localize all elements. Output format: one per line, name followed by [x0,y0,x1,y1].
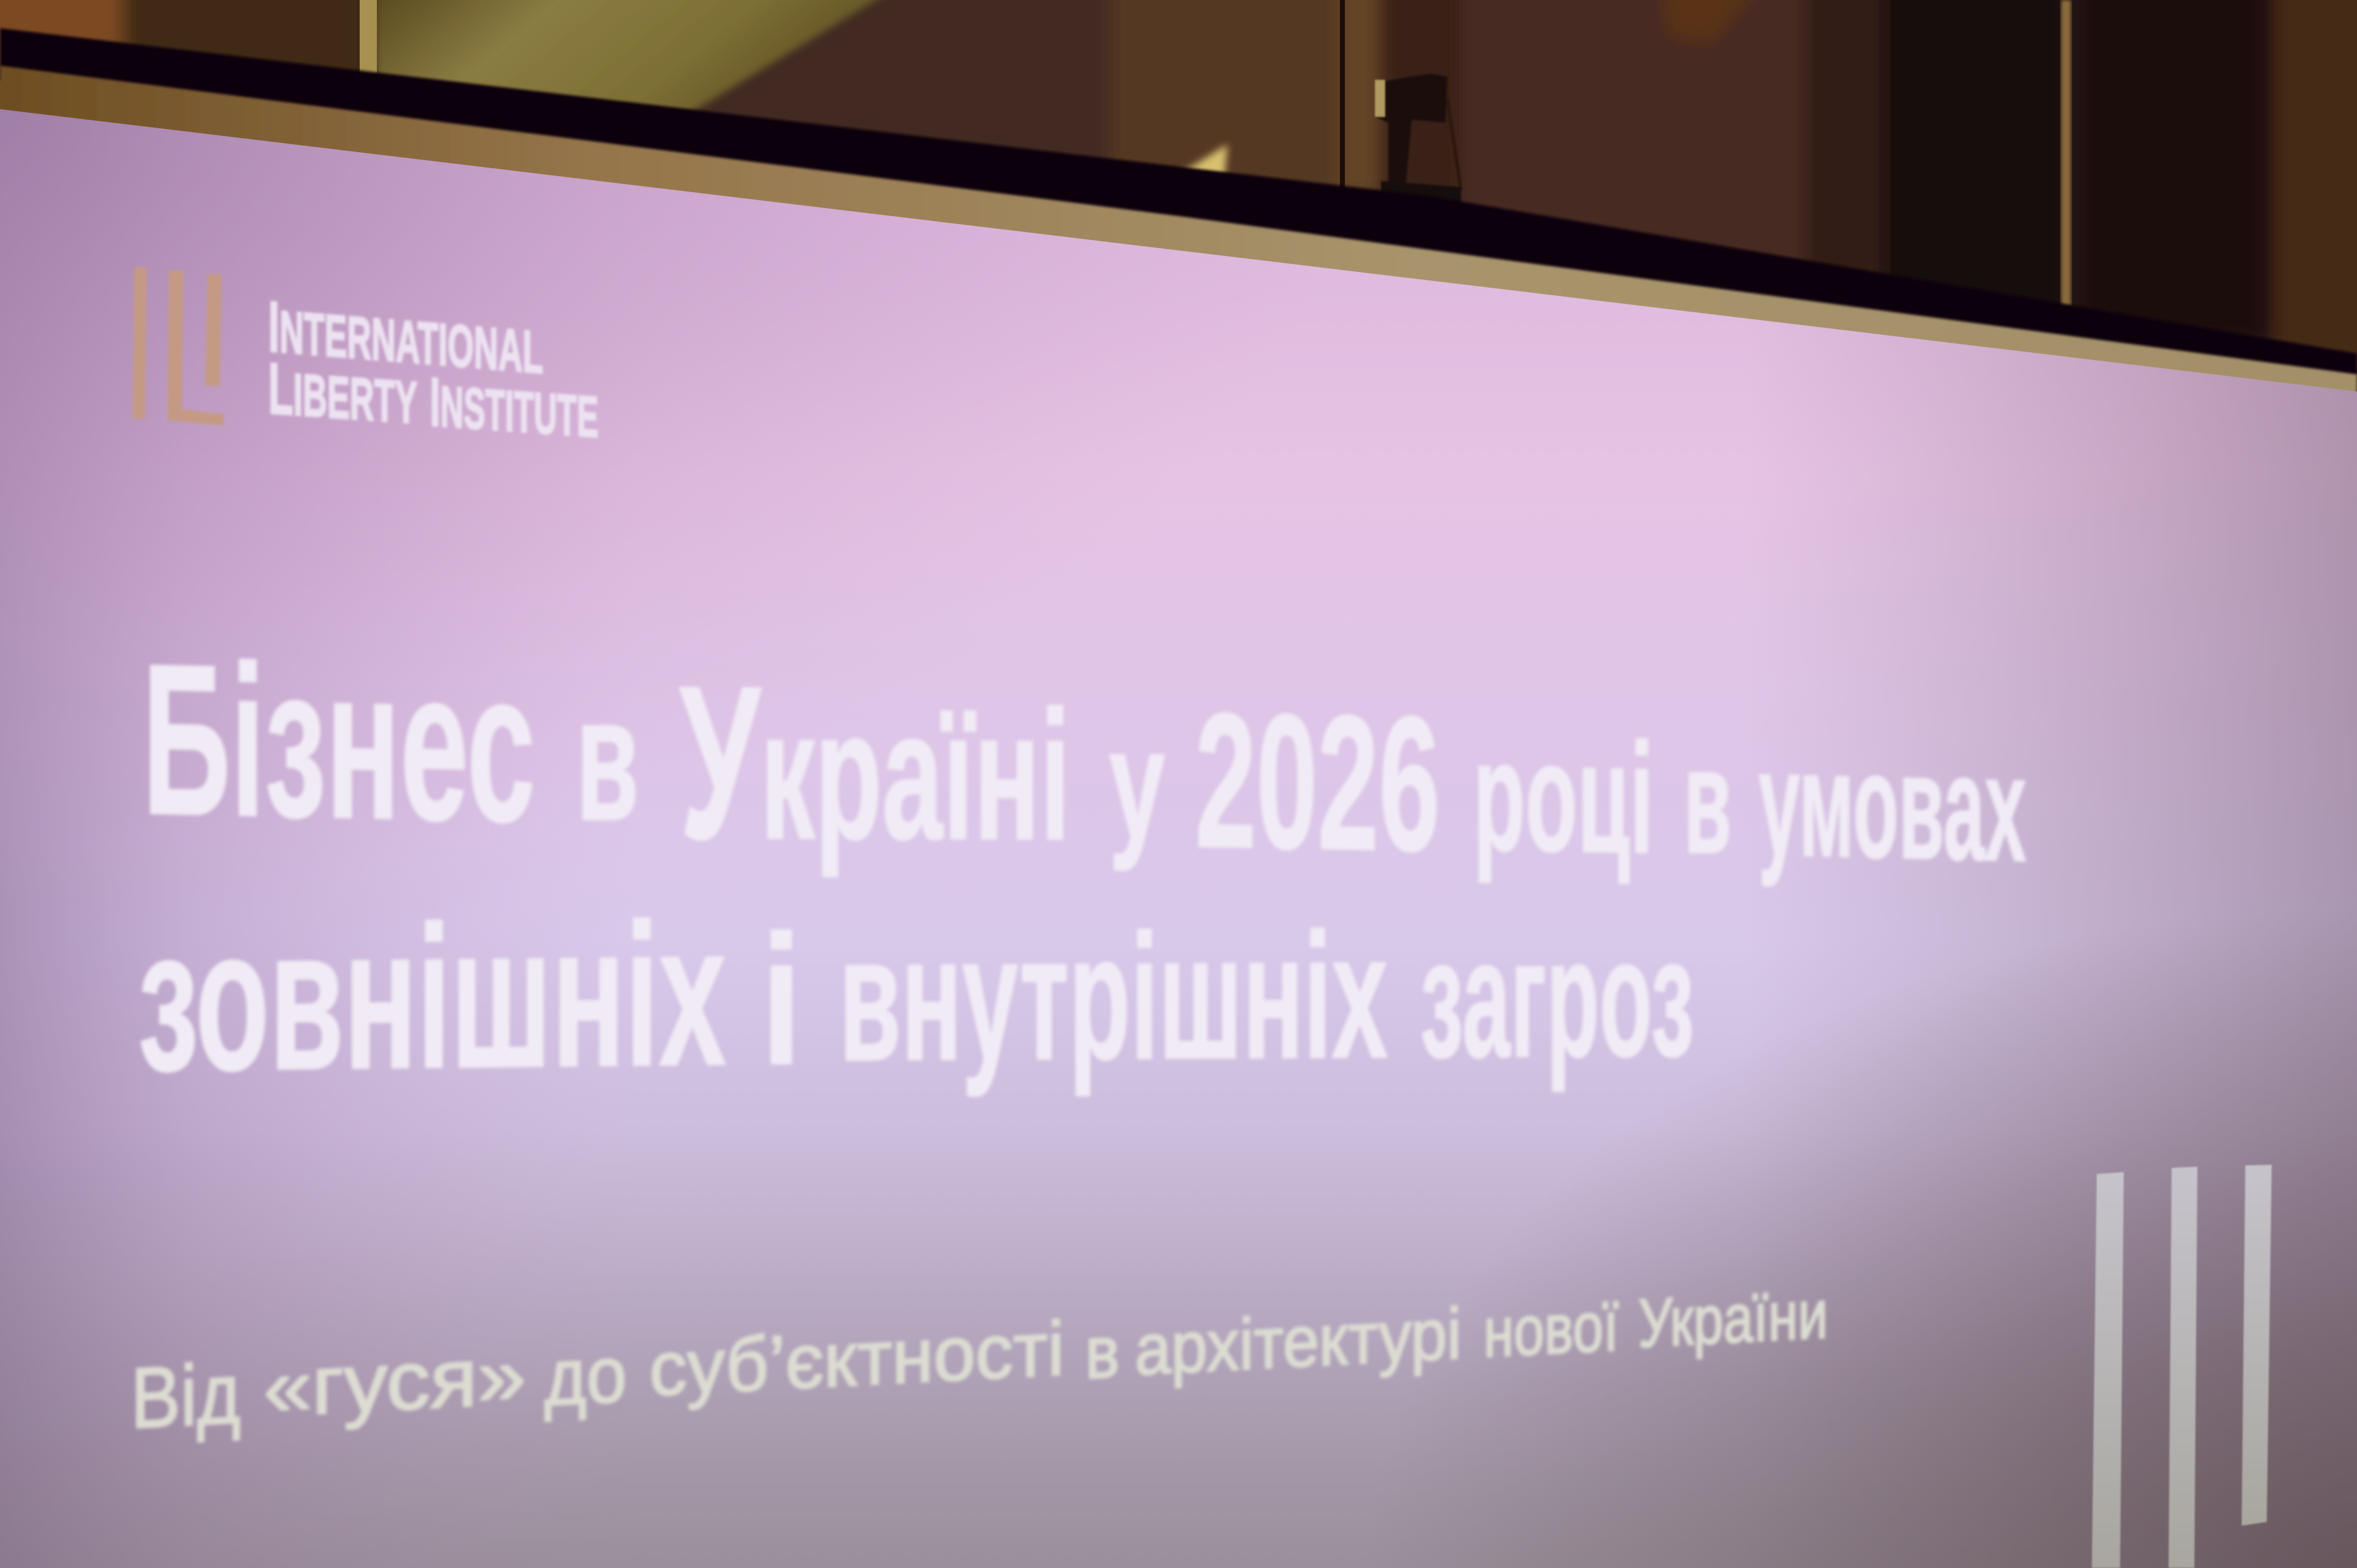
background room behind the screen [0,0,2357,491]
title: внутрішніх [839,896,1388,1099]
title: Бізнес [142,619,535,867]
title: у [1109,697,1165,871]
title: зовнішніх [138,881,727,1113]
title: в [1684,716,1732,884]
title: і [761,897,802,1103]
logo mark [133,267,223,425]
subtitle: Від [131,1345,241,1446]
screen white frame [0,66,2357,399]
subtitle: в [1085,1310,1120,1394]
title: 2026 [1195,674,1440,892]
logo wordmark: LIBERTY [268,348,417,439]
logo wordmark: INTERNATIONAL [268,286,543,388]
subtitle: України [1638,1275,1828,1362]
title: в [576,660,639,857]
title [138,619,2026,1113]
projected slide: умовах [1759,718,2026,893]
decorative three bars [2092,1165,2272,1568]
subtitle: до [544,1329,627,1423]
device on top of the screen [1375,74,1461,209]
title: році [1473,708,1654,886]
logo wordmark: INSTITUTE [430,363,598,452]
subtitle: суб’єктності [649,1305,1064,1412]
subtitle: нової [1484,1287,1619,1372]
logo wordmark [268,286,598,452]
subtitle: архітектурі [1135,1293,1461,1391]
subtitle [131,1275,1828,1446]
black screen housing rail [0,28,2357,393]
subtitle: «гуся» [263,1328,526,1434]
title: загроз [1420,903,1694,1094]
title: Україні [679,641,1070,886]
